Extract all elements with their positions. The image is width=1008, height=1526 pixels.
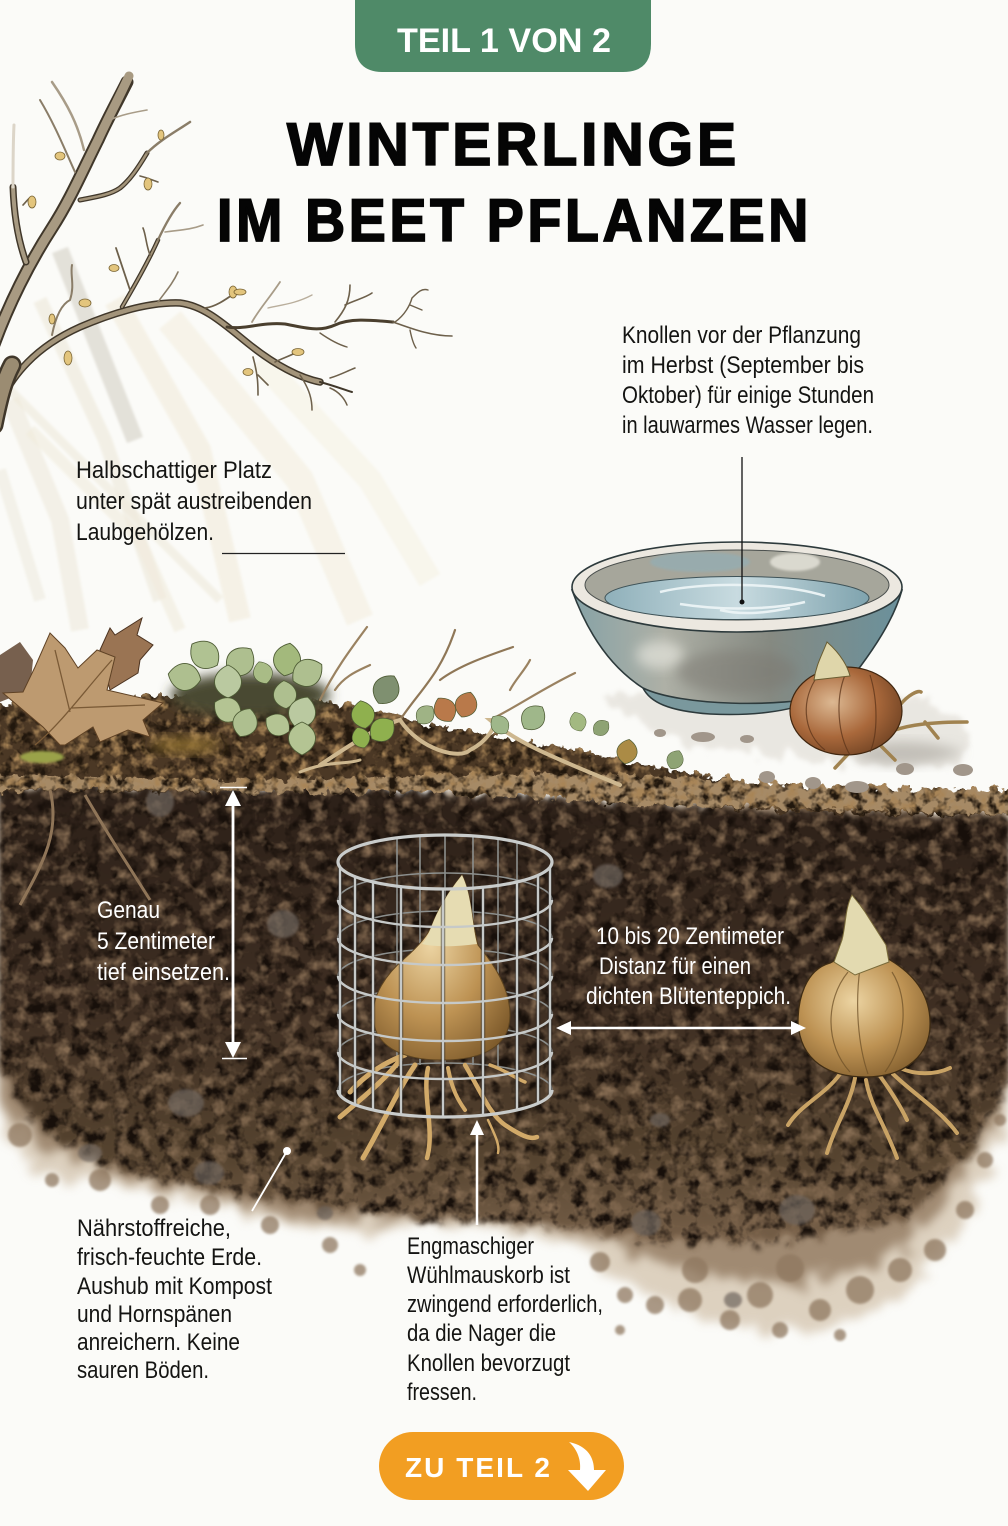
text: soil: Aushub mit Kompost — [77, 1273, 272, 1300]
title: WINTERLINGE — [287, 111, 740, 178]
bulb body — [373, 875, 510, 1060]
pale soil fringe — [0, 790, 1008, 1335]
text: depth: Genau — [97, 897, 160, 924]
text: location — [76, 457, 312, 546]
light rays behind tree — [0, 250, 430, 630]
text: soil: anreichern. Keine — [77, 1329, 240, 1356]
tree branches — [0, 76, 452, 425]
button: zu Teil 2 — [379, 1432, 624, 1500]
twigs on ground — [300, 627, 620, 785]
mid soil band — [0, 790, 1008, 1285]
text: soil — [77, 1215, 272, 1384]
text: cage: Engmaschiger — [407, 1233, 534, 1260]
leader line: location — [222, 552, 345, 554]
leader: soil — [252, 1147, 291, 1211]
roots — [340, 1055, 537, 1158]
arrow: distance — [556, 1021, 806, 1035]
leader line: water — [740, 457, 744, 604]
clover leaves — [166, 634, 687, 772]
wire cage with bulb — [338, 835, 552, 1158]
roots left edge — [20, 790, 150, 905]
title — [217, 111, 812, 254]
text: cage: da die Nager die — [407, 1320, 556, 1347]
text: water soaking — [622, 322, 874, 439]
text: cage: zwingend erforderlich, — [407, 1291, 603, 1318]
leaf litter and crust — [0, 673, 1008, 815]
cage front wires — [340, 867, 550, 1117]
text: depth: tief einsetzen. — [97, 959, 230, 986]
main upward branch — [0, 82, 127, 350]
icon: soaked bulb on ground — [790, 642, 967, 768]
text: depth: 5 Zentimeter — [97, 928, 215, 955]
cage back wires — [338, 835, 552, 1090]
header tab: Teil 1 von 2 — [355, 0, 651, 72]
text: soil: sauren Böden. — [77, 1357, 209, 1384]
text: cage: fressen. — [407, 1379, 477, 1406]
text: water soaking: Oktober) für einige Stunden — [622, 382, 874, 409]
text: cage — [407, 1233, 603, 1406]
text: distance: 10 bis 20 Zentimeter — [596, 923, 784, 950]
dark soil body — [0, 784, 1008, 1242]
soil clods along lower edge — [8, 1114, 1006, 1341]
buds — [28, 130, 304, 376]
icon: water bowl — [572, 542, 902, 714]
header tab: Teil 1 von 2: TEIL 1 VON 2 — [397, 22, 611, 60]
text: water soaking: in lauwarmes Wasser legen. — [622, 412, 873, 439]
lower main branch — [0, 303, 320, 420]
text: water soaking: im Herbst (September bis — [622, 352, 864, 379]
text: distance: dichten Blütenteppich. — [586, 983, 791, 1010]
text: location: Halbschattiger Platz — [76, 457, 272, 484]
text: cage: Knollen bevorzugt — [407, 1350, 570, 1377]
soil stones — [78, 787, 815, 1308]
text: soil: und Hornspänen — [77, 1301, 232, 1328]
text: distance — [586, 923, 791, 1010]
text: location: Laubgehölzen. — [76, 519, 214, 546]
oak leaves — [0, 618, 163, 745]
text: distance: Distanz für einen — [599, 953, 751, 980]
button: zu Teil 2: ZU TEIL 2 — [405, 1452, 550, 1483]
arrow: to cage — [470, 1120, 484, 1225]
title: IM BEET PFLANZEN — [217, 187, 812, 254]
text: cage: Wühlmauskorb ist — [407, 1262, 570, 1289]
icon: free-standing bulb — [788, 895, 957, 1158]
text: soil: frisch-feuchte Erde. — [77, 1244, 262, 1271]
text: location: unter spät austreibenden — [76, 488, 312, 515]
arrow: planting depth — [220, 788, 247, 1058]
bowl shadow and gravel — [600, 692, 973, 793]
text: soil: Nährstoffreiche, — [77, 1215, 231, 1242]
text: depth — [97, 897, 230, 986]
icon: curved down arrow — [568, 1442, 606, 1491]
soil cross-section — [0, 784, 1008, 1341]
text: water soaking: Knollen vor der Pflanzung — [622, 322, 861, 349]
